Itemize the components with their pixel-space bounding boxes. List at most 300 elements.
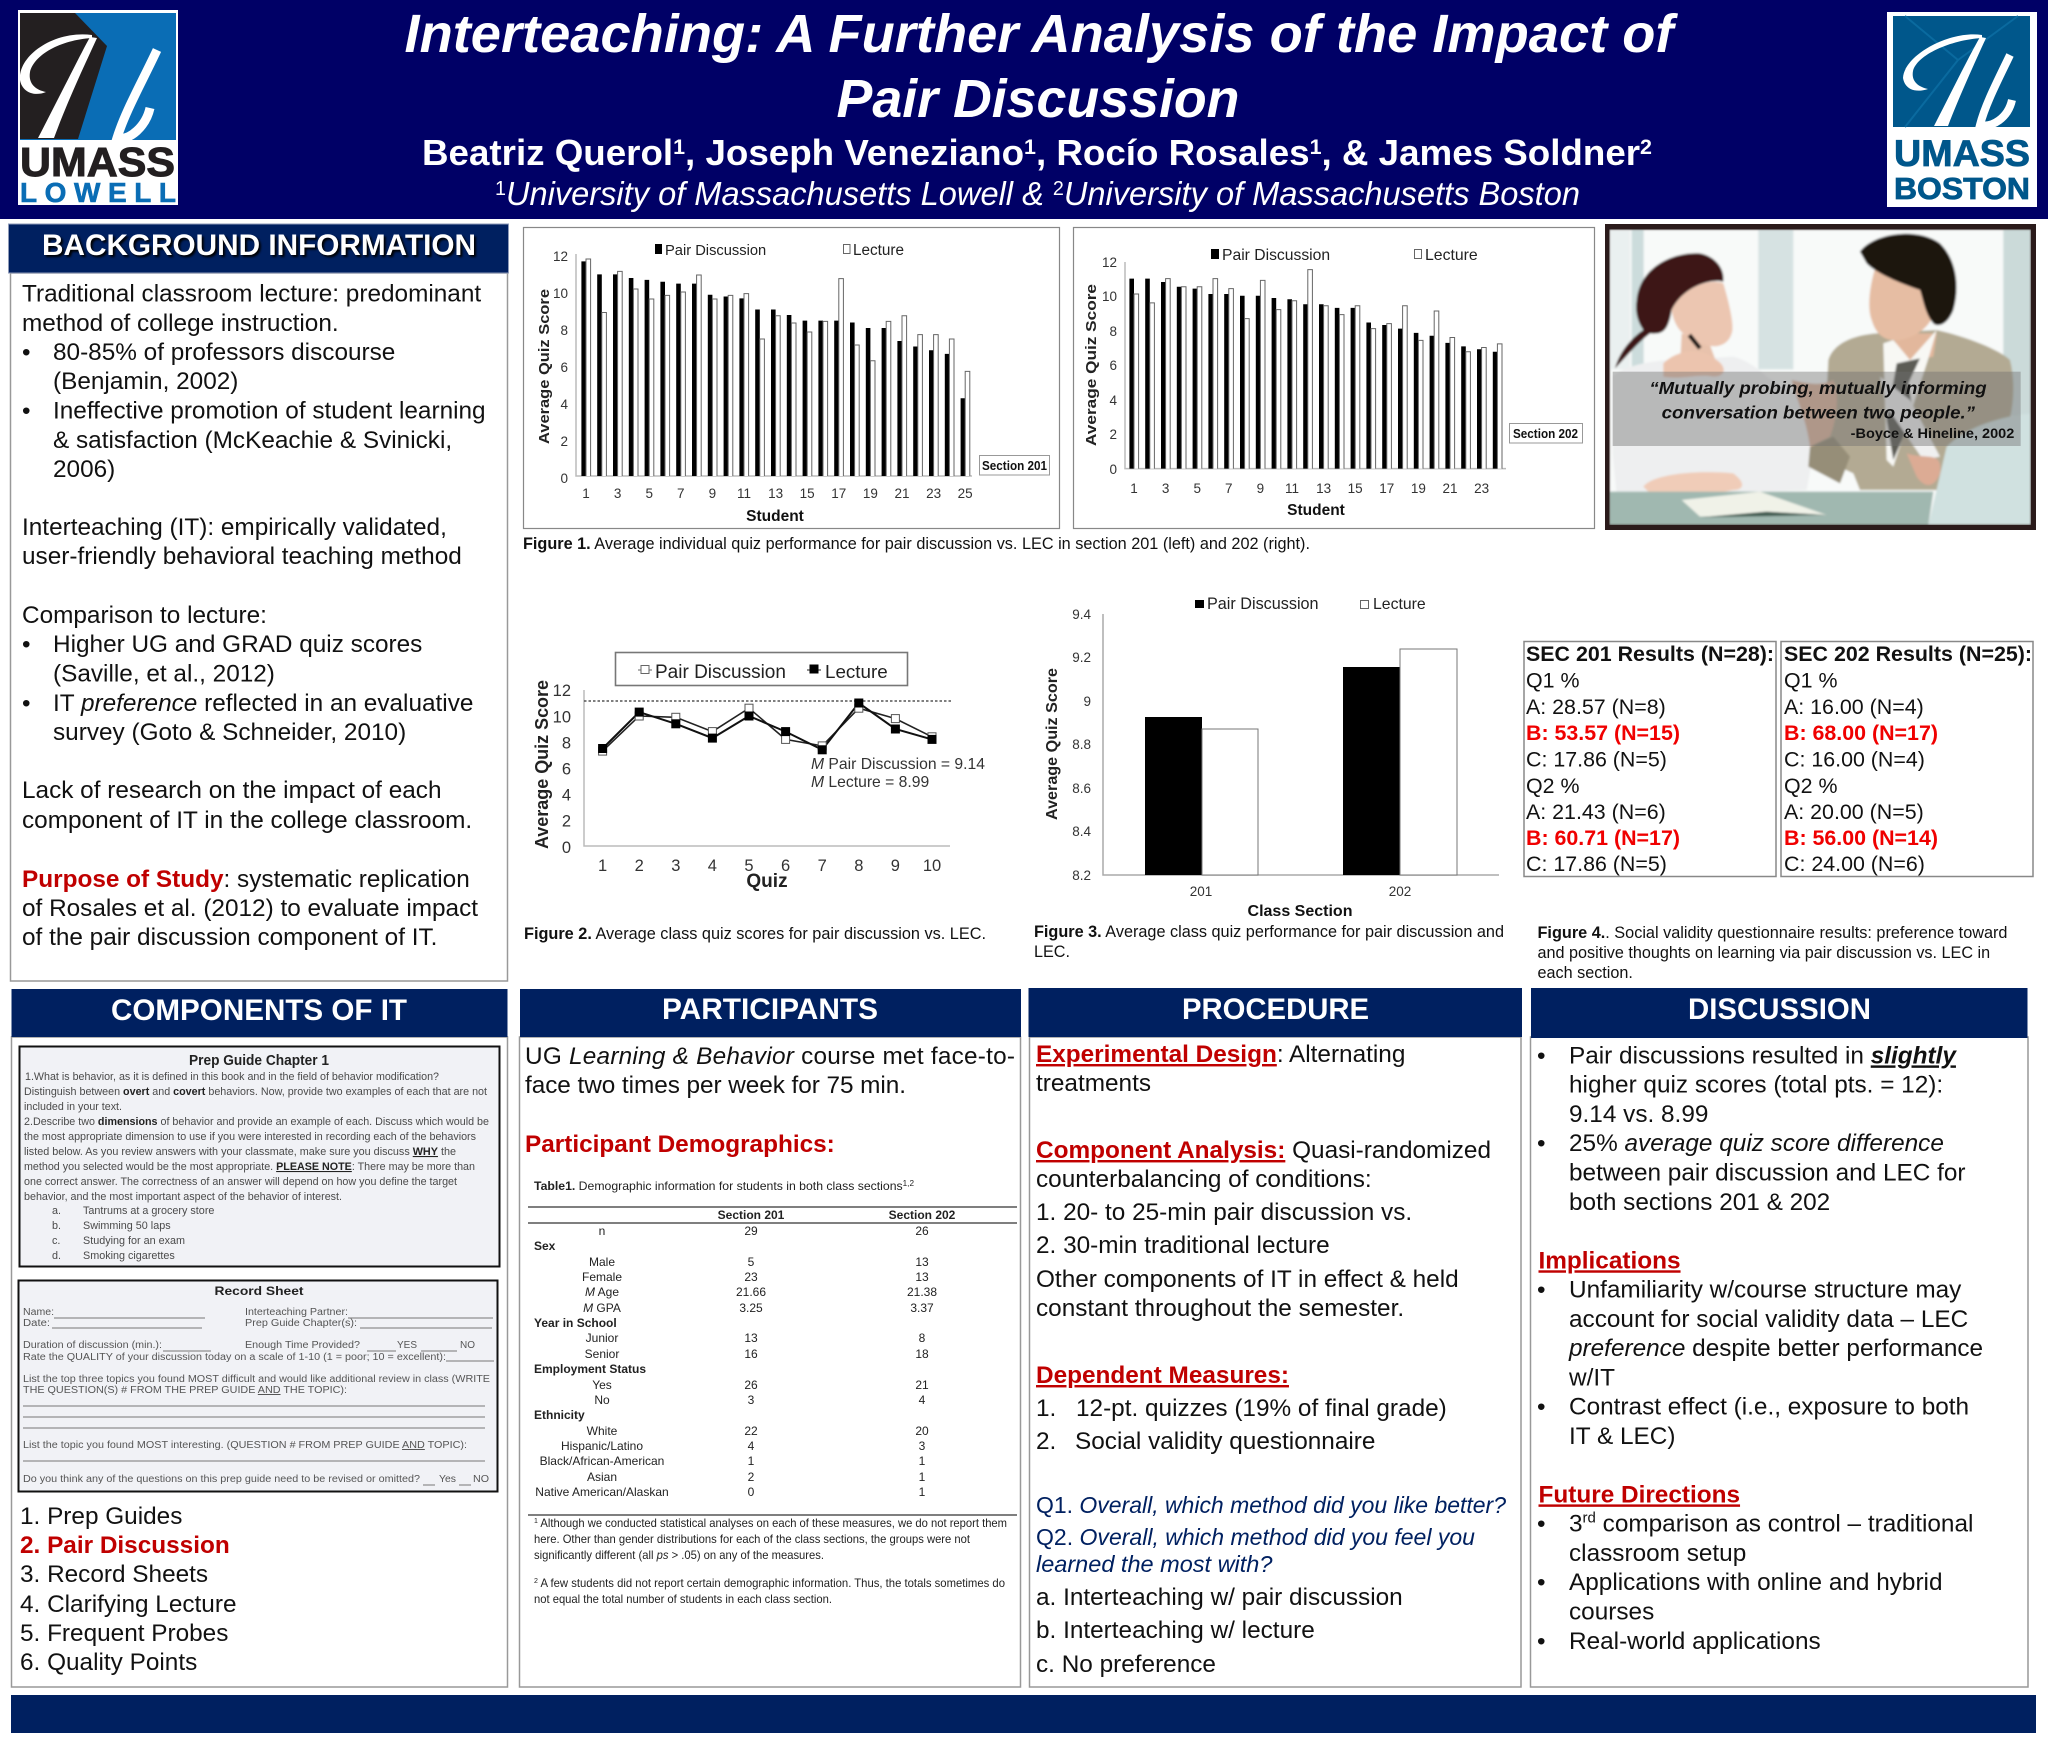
table: SEC 201 results: B: 60.71 (N=17): [1526, 826, 1680, 850]
table: demographics: 1: [748, 1454, 755, 1468]
record sheet: Duration of discussion (min.):: [23, 1340, 162, 1351]
table: demographics: Junior: [586, 1331, 618, 1345]
record sheet: List the top three topics you found MOST difficult and would like additional review in class (WRITE: [23, 1374, 490, 1385]
logo: UMass Lowell: UMASS: [20, 139, 175, 185]
text: main findings: •: [1537, 1042, 1546, 1069]
y-axis labels: [1072, 607, 1091, 883]
prep guide sheet: included in your text.: [24, 1101, 122, 1113]
y-axis labels: 4: [560, 397, 568, 412]
x-axis labels: 7: [818, 857, 827, 875]
x-axis labels: 4: [708, 857, 717, 875]
table: demographics: 4: [748, 1439, 755, 1453]
y-axis labels: 8.2: [1072, 868, 1091, 883]
affiliations: University of Massachusetts Lowell &: [506, 175, 1053, 212]
table: demographics: No: [594, 1393, 610, 1407]
title: [404, 4, 1679, 129]
table: demographics: Asian: [587, 1470, 617, 1484]
table: SEC 202 results: C: 16.00 (N=4): [1784, 748, 1925, 772]
table footnotes: A few students did not report certain demographic information. Thus, the totals sometimes do: [538, 1576, 1005, 1590]
record sheet: YES: [397, 1340, 417, 1351]
table: demographics: Hispanic/Latino: [561, 1439, 643, 1453]
text: background body: 80-85% of professors discourse: [53, 339, 395, 366]
x-axis labels: [582, 486, 973, 501]
record sheet: List the topic you found MOST interesting. (QUESTION # FROM PREP GUIDE AND TOPIC):: [23, 1440, 467, 1451]
quote: [1613, 372, 2021, 446]
x-axis labels: 19: [1411, 481, 1426, 496]
record sheet: NO: [460, 1340, 475, 1351]
x-axis labels: 5: [645, 486, 653, 501]
text: future directions: •: [1537, 1569, 1546, 1596]
y-axis labels: 8: [562, 734, 571, 752]
prep guide sheet: the most appropriate dimension to use if you were interested in recording each of the behaviors: [24, 1131, 477, 1143]
table: demographics: 3.37: [910, 1301, 934, 1315]
text: implications: [1537, 1247, 1983, 1450]
record sheet: Interteaching Partner:: [245, 1307, 348, 1318]
text: background body: •: [22, 631, 31, 658]
table: demographics: 26: [915, 1224, 929, 1238]
text: main findings: 25% average quiz score difference: [1569, 1130, 1944, 1157]
legend: Lecture: [1425, 247, 1478, 264]
list of components: 5. Frequent Probes: [20, 1620, 228, 1647]
table: demographics: 13: [915, 1255, 929, 1269]
logo: UMass Lowell: LOWELL: [20, 177, 176, 208]
text: implications: •: [1537, 1394, 1546, 1421]
authors: 1: [673, 136, 685, 159]
text: response options: [1036, 1584, 1403, 1678]
table: demographics: 5: [748, 1255, 755, 1269]
text: main findings: between pair discussion and LEC for: [1569, 1160, 1966, 1186]
logo: UMass Boston: UMASS: [1894, 133, 2030, 174]
record sheet: NO: [473, 1474, 489, 1485]
record sheet: THE QUESTION(S) # FROM THE PREP GUIDE AND THE TOPIC):: [23, 1385, 347, 1396]
chart: figure 1 section 201: [524, 228, 1060, 528]
table footnotes: Although we conducted statistical analyses on each of these measures, we do not report them: [538, 1516, 1007, 1530]
caption: figure 4: and positive thoughts on learning via pair discussion vs. LEC in: [1538, 944, 1990, 962]
text: background body: Higher UG and GRAD quiz scores: [53, 631, 422, 658]
table: SEC 202 results: A: 16.00 (N=4): [1784, 695, 1924, 719]
table: demographics: 4: [919, 1393, 926, 1407]
table footnotes: not equal the total number of students in each class section.: [534, 1592, 832, 1606]
text: background body: Ineffective promotion of student learning: [53, 398, 486, 424]
text: implications: account for social validity data – LEC: [1569, 1306, 1968, 1333]
text: background body: method of college instruction.: [22, 310, 339, 337]
x-axis labels: 8: [854, 857, 863, 875]
text: future directions: •: [1537, 1628, 1546, 1655]
text: background body: of Rosales et al. (2012) to evaluate impact: [22, 895, 478, 922]
text: dependent measures: 2.: [1036, 1428, 1056, 1455]
caption: figure 2: Figure 2. Average class quiz scores for pair discussion vs. LEC.: [524, 925, 986, 943]
table: SEC 202 results: SEC 202 Results (N=25):: [1784, 642, 2032, 666]
text: questionnaire questions: [1036, 1492, 1506, 1577]
y-axis labels: 8.8: [1072, 737, 1091, 752]
table: demographics: White: [587, 1424, 618, 1438]
record sheet: Yes: [439, 1474, 456, 1485]
chart: figure 2 line chart: [532, 652, 985, 892]
affiliations: 2: [1053, 178, 1064, 200]
table footnotes: here. Other than gender distributions for each of the class sections, the groups were not: [534, 1532, 971, 1546]
table: demographics: 23: [744, 1270, 758, 1284]
x-axis labels: 1: [1130, 481, 1138, 496]
y-axis labels: 8.4: [1072, 824, 1091, 839]
table: demographics: 3: [748, 1393, 755, 1407]
text: dependent measures: 1.: [1036, 1395, 1056, 1422]
text: implications: Unfamiliarity w/course structure may: [1569, 1277, 1962, 1304]
table: demographics: Native American/Alaskan: [535, 1485, 669, 1499]
text: future directions: Real-world applications: [1569, 1628, 1821, 1655]
table: SEC 202 results: B: 68.00 (N=17): [1784, 721, 1938, 745]
text: future directions: •: [1537, 1511, 1546, 1538]
prep guide sheet: d.: [52, 1250, 61, 1262]
table: SEC 202 results: C: 24.00 (N=6): [1784, 852, 1925, 876]
table: SEC 201 results: SEC 201 Results (N=28):: [1526, 642, 1774, 666]
panel: background information: [8, 224, 508, 981]
record sheet: Enough Time Provided?: [245, 1340, 360, 1351]
authors: , Joseph Veneziano: [685, 132, 1024, 173]
text: questionnaire questions: Q2. Overall, which method did you feel you: [1036, 1524, 1475, 1550]
chart: figure 3 bars: 202: [1389, 884, 1411, 899]
table: demographics: 1: [919, 1454, 926, 1468]
x-axis labels: 11: [1285, 481, 1299, 496]
table: demographics: Section 201: [718, 1208, 785, 1222]
list of components: 1. Prep Guides: [20, 1503, 182, 1530]
table: demographics: 13: [744, 1331, 758, 1345]
x-axis labels: 13: [1316, 481, 1331, 496]
record sheet: Date:: [23, 1318, 50, 1329]
text: background body: Interteaching (IT): empirically validated,: [22, 514, 447, 541]
text: design and analysis: 2. 30-min traditional lecture: [1036, 1232, 1330, 1259]
list of components: 2. Pair Discussion: [20, 1532, 230, 1559]
list of components: 3. Record Sheets: [20, 1561, 208, 1588]
legend: Pair Discussion: [665, 243, 766, 259]
text: implications: Implications: [1538, 1247, 1681, 1274]
text: future directions: rd: [1583, 1510, 1596, 1527]
text: background body: 2006): [53, 456, 115, 483]
legend: Lecture: [853, 242, 904, 259]
table: demographics: Section 202: [889, 1208, 956, 1222]
y-axis labels: 10: [1102, 289, 1117, 304]
authors: 2: [1640, 136, 1652, 159]
table: demographics: 8: [919, 1331, 926, 1345]
text: background body: •: [22, 339, 31, 366]
text: background body: (Saville, et al., 2012): [53, 660, 275, 688]
chart: figure 3 bars: Class Section: [1248, 903, 1352, 920]
x-axis labels: [598, 857, 941, 875]
table: SEC 201 results: C: 17.86 (N=5): [1526, 748, 1667, 772]
table: SEC 201 results: Q1 %: [1526, 668, 1580, 692]
chart: figure 1 section 202: Student: [1287, 502, 1345, 519]
text: future directions: [1537, 1481, 1973, 1655]
table: demographics: 1,2: [903, 1179, 915, 1188]
legend: [1195, 595, 1426, 613]
prep guide sheet: one correct answer. The correctness of an answer will depend on how you define the target: [24, 1176, 457, 1188]
x-axis labels: 15: [800, 486, 815, 501]
text: implications: w/IT: [1568, 1364, 1615, 1391]
chart: figure 1 section 202: [1074, 228, 1594, 528]
authors: , & James Soldner: [1322, 132, 1640, 173]
table footnotes: 1: [534, 1516, 538, 1525]
text: background body: Lack of research on the impact of each: [22, 777, 442, 804]
y-axis labels: 12: [553, 682, 571, 700]
heading: procedure: [1028, 988, 1522, 1037]
text: dependent measures: [1036, 1362, 1447, 1455]
text: design and analysis: Experimental Design: Alternating: [1036, 1041, 1405, 1068]
panel: procedure: [1028, 988, 1522, 1687]
y-axis labels: [553, 682, 571, 857]
text: design and analysis: Other components of IT in effect & held: [1036, 1266, 1459, 1293]
table: demographics: M GPA: [583, 1301, 621, 1315]
text: response options: b. Interteaching w/ lecture: [1036, 1617, 1315, 1644]
table: demographics: 18: [915, 1347, 929, 1361]
text: future directions: 3: [1569, 1511, 1583, 1538]
table: demographics: Table1. Demographic information for students in both class sections: [534, 1179, 896, 1193]
heading: discussion: DISCUSSION: [1688, 993, 1871, 1026]
text: background body: •: [22, 398, 31, 424]
table: demographics: 21.38: [907, 1285, 937, 1299]
legend: Pair Discussion: [1222, 247, 1330, 264]
text: future directions: courses: [1569, 1598, 1654, 1626]
y-axis labels: 2: [562, 812, 571, 830]
y-axis labels: [553, 249, 568, 486]
heading: components of IT: [12, 989, 508, 1037]
y-axis labels: 10: [553, 708, 571, 726]
text: background body: Purpose of Study: systematic replication: [22, 866, 470, 893]
table: demographics: n: [599, 1224, 605, 1238]
chart: figure 3 bars: 201: [1190, 884, 1212, 899]
y-axis labels: 6: [560, 360, 568, 375]
y-axis labels: 10: [553, 286, 568, 301]
chart: figure 1 section 201: Average Quiz Score: [536, 289, 553, 444]
text: background body: & satisfaction (McKeachie & Svinicki,: [53, 427, 452, 454]
y-axis labels: 9.4: [1072, 607, 1091, 622]
caption: figure 3: [1034, 923, 1504, 961]
table: SEC 202 results: B: 56.00 (N=14): [1784, 826, 1938, 850]
y-axis labels: 4: [1109, 393, 1117, 408]
x-axis labels: 13: [768, 486, 783, 501]
prep guide sheet: Swimming 50 laps: [83, 1220, 171, 1232]
text: course description: [525, 1043, 1015, 1099]
text: implications: •: [1537, 1277, 1546, 1304]
table: demographics: 1: [919, 1485, 926, 1499]
section label: Section 202: [1513, 427, 1578, 441]
record sheet: Prep Guide Chapter(s):: [245, 1318, 357, 1329]
table: demographics: Ethnicity: [534, 1408, 585, 1422]
logo: UMass Boston: [1887, 12, 2037, 207]
section label: [980, 456, 1050, 475]
heading: participants: [520, 989, 1021, 1037]
text: implications: Contrast effect (i.e., exposure to both: [1569, 1394, 1969, 1421]
x-axis labels: 6: [781, 857, 790, 875]
chart: figure 1 section 201: Student: [746, 508, 804, 525]
list of components: 4. Clarifying Lecture: [20, 1591, 236, 1618]
text: design and analysis: treatments: [1036, 1070, 1151, 1097]
title: Interteaching: A Further Analysis of the Impact of: [404, 4, 1679, 64]
record sheet: [18, 1280, 498, 1492]
prep guide sheet: behavior, and the most important aspect of the behavior of interest.: [24, 1191, 342, 1203]
x-axis labels: 11: [737, 486, 751, 501]
text: main findings: higher quiz scores (total pts. = 12):: [1569, 1072, 1943, 1099]
x-axis labels: 23: [926, 486, 941, 501]
text: main findings: Pair discussions resulted in slightly: [1569, 1042, 1957, 1069]
table: demographics: 29: [744, 1224, 758, 1238]
text: background body: [22, 280, 486, 951]
list of components: 6. Quality Points: [20, 1649, 197, 1676]
table: demographics: 22: [744, 1424, 758, 1438]
table: demographics: 3: [919, 1439, 926, 1453]
legend: Lecture: [1373, 596, 1426, 613]
table: demographics: Male: [589, 1255, 615, 1269]
x-axis labels: 21: [894, 486, 910, 501]
table: demographics: Employment Status: [534, 1362, 646, 1376]
x-axis labels: 9: [1257, 481, 1264, 496]
y-axis labels: 2: [560, 434, 568, 449]
table: demographics: Yes: [592, 1378, 612, 1392]
header band: [0, 0, 2048, 219]
table footnotes: [534, 1516, 1007, 1606]
x-axis labels: 1: [598, 857, 607, 875]
prep guide sheet: method you selected would be the most appropriate. PLEASE NOTE: There may be more than: [24, 1161, 475, 1173]
means annotation: M Lecture = 8.99: [811, 774, 929, 791]
y-axis labels: 12: [1102, 255, 1117, 270]
table: SEC 201 results: C: 17.86 (N=5): [1526, 852, 1667, 876]
x-axis labels: 10: [923, 857, 941, 875]
x-axis labels: 19: [863, 486, 878, 501]
logo: UMass Boston: BOSTON: [1894, 171, 2030, 206]
x-axis labels: 9: [891, 857, 900, 875]
table: SEC 201 results: A: 28.57 (N=8): [1526, 695, 1666, 719]
text: course description: UG Learning & Behavior course met face-to-: [525, 1043, 1015, 1070]
text: main findings: [1537, 1042, 1966, 1216]
prep guide sheet: 1.What is behavior, as it is defined in this book and in the field of behavior modification?: [25, 1071, 439, 1083]
text: response options: a. Interteaching w/ pair discussion: [1036, 1584, 1403, 1611]
text: design and analysis: 1. 20- to 25-min pair discussion vs.: [1036, 1199, 1412, 1226]
table: demographics: [528, 1179, 1017, 1515]
chart: figure 2 line chart: Average Quiz Score: [532, 680, 552, 849]
chart: figure 1 section 202: Average Quiz Score: [1083, 284, 1100, 446]
table footnotes: 2: [534, 1576, 538, 1585]
text: response options: c. No preference: [1036, 1651, 1216, 1678]
heading: background information: BACKGROUND INFORMATION: [42, 229, 476, 262]
caption: figure 4: [1538, 924, 2008, 982]
table: demographics: 20: [915, 1424, 929, 1438]
table: SEC 201 results: A: 21.43 (N=6): [1526, 800, 1666, 824]
authors: 1: [1310, 136, 1322, 159]
table: demographics: 13: [915, 1270, 929, 1284]
x-axis labels: 3: [1162, 481, 1169, 496]
prep guide sheet: c.: [52, 1235, 60, 1247]
legend: Pair Discussion: [1207, 595, 1319, 613]
chart: figure 2 line chart: Quiz: [746, 871, 788, 892]
table: demographics: 2: [748, 1470, 755, 1484]
title: Pair Discussion: [836, 69, 1240, 129]
prep guide sheet: listed below. As you review answers with your classmate, make sure you discuss WHY the: [24, 1146, 456, 1158]
text: background body: survey (Goto & Schneider, 2010): [53, 719, 406, 746]
table: demographics: 21: [915, 1378, 929, 1392]
x-axis labels: 5: [744, 857, 754, 875]
table: SEC 202 results: [1781, 642, 2033, 876]
panel: participants: [520, 989, 1021, 1687]
text: design and analysis: [1036, 1041, 1491, 1322]
section label: Section 201: [982, 459, 1047, 473]
text: background body: (Benjamin, 2002): [53, 368, 238, 395]
x-axis labels: [1130, 481, 1489, 496]
y-axis labels: [1102, 255, 1117, 477]
table: SEC 201 results: [1524, 642, 1776, 876]
text: implications: IT & LEC): [1569, 1423, 1675, 1450]
y-axis labels: 0: [560, 471, 568, 486]
heading: background information: [8, 224, 508, 273]
prep guide sheet: [20, 1046, 500, 1266]
means annotation: [811, 756, 985, 791]
text: main findings: 9.14 vs. 8.99: [1569, 1101, 1708, 1128]
x-axis labels: 7: [1225, 481, 1233, 496]
heading: components of IT: COMPONENTS OF IT: [111, 994, 407, 1027]
authors: Beatriz Querol: [422, 132, 668, 173]
x-axis labels: 3: [671, 857, 680, 875]
y-axis labels: 8: [1109, 324, 1117, 339]
y-axis labels: 9.2: [1072, 650, 1091, 665]
table: SEC 202 results: A: 20.00 (N=5): [1784, 800, 1924, 824]
table: SEC 201 results: B: 53.57 (N=15): [1526, 721, 1680, 745]
text: course description: face two times per week for 75 min.: [525, 1072, 906, 1099]
text: background body: •: [22, 690, 31, 717]
prep guide sheet: Tantrums at a grocery store: [83, 1205, 214, 1217]
y-axis labels: 12: [553, 249, 568, 264]
x-axis labels: 7: [677, 486, 685, 501]
text: future directions: classroom setup: [1569, 1540, 1746, 1567]
x-axis labels: 17: [1379, 481, 1394, 496]
means annotation: M Pair Discussion = 9.14: [811, 756, 985, 773]
text: background body: Traditional classroom lecture: predominant: [22, 280, 481, 308]
table: demographics: 21.66: [736, 1285, 766, 1299]
prep guide sheet: b.: [52, 1220, 61, 1232]
photo: two people in conversation with quote: [1605, 224, 2036, 530]
list of components: [20, 1503, 236, 1676]
x-axis labels: 21: [1442, 481, 1458, 496]
footer band: [11, 1695, 2036, 1733]
prep guide sheet: 2.Describe two dimensions of behavior and provide an example of each. Discuss which would be: [24, 1116, 489, 1128]
record sheet: Record Sheet: [214, 1284, 304, 1298]
y-axis labels: 9: [1083, 694, 1091, 709]
text: future directions: comparison as control – traditional: [1596, 1511, 1973, 1538]
record sheet: Rate the QUALITY of your discussion today on a scale of 1-10 (1 = poor; 10 = excellent):: [23, 1352, 446, 1363]
quote: -Boyce & Hineline, 2002: [1851, 425, 2015, 441]
table: demographics: Sex: [534, 1239, 556, 1253]
section label: [1510, 424, 1582, 443]
logo: UMass Lowell: [18, 10, 178, 208]
table: SEC 201 results: Q2 %: [1526, 774, 1580, 798]
heading: participants: PARTICIPANTS: [662, 993, 878, 1026]
x-axis labels: 23: [1474, 481, 1489, 496]
x-axis labels: 3: [614, 486, 621, 501]
x-axis labels: 5: [1193, 481, 1201, 496]
text: background body: IT preference reflected in an evaluative: [53, 690, 473, 717]
prep guide sheet: Smoking cigarettes: [83, 1250, 175, 1262]
text: future directions: Applications with online and hybrid: [1569, 1569, 1943, 1596]
text: future directions: Future Directions: [1538, 1481, 1740, 1508]
y-axis labels: 0: [1109, 462, 1117, 477]
heading: procedure: PROCEDURE: [1182, 993, 1369, 1026]
caption: figure 3: Figure 3. Average class quiz performance for pair discussion and: [1034, 923, 1504, 941]
y-axis labels: 4: [562, 786, 571, 804]
caption: figure 1: Figure 1. Average individual quiz performance for pair discussion vs. LEC in section 201 (left) and 202 (right).: [523, 535, 1310, 553]
text: background body: user-friendly behavioral teaching method: [22, 543, 462, 570]
prep guide sheet: Distinguish between overt and covert behaviors. Now, provide two examples of each that are not: [24, 1086, 487, 1098]
x-axis labels: 9: [709, 486, 716, 501]
heading: participant demographics: Participant Demographics:: [525, 1131, 835, 1158]
table: SEC 202 results: Q2 %: [1784, 774, 1838, 798]
chart: figure 3 bars: [1044, 595, 1499, 920]
table: demographics: Senior: [585, 1347, 619, 1361]
